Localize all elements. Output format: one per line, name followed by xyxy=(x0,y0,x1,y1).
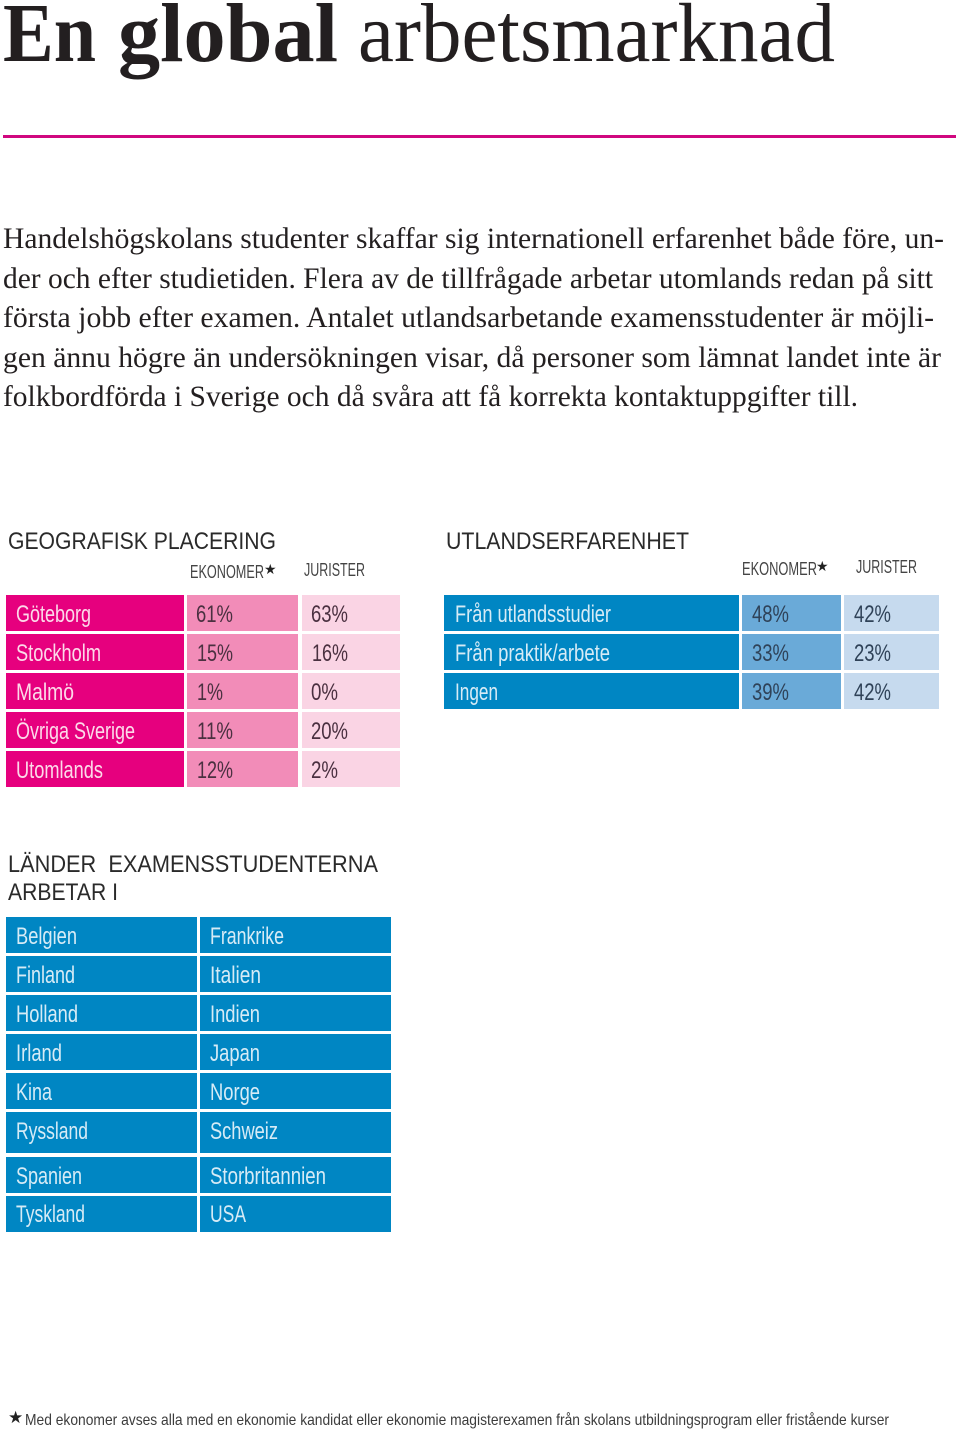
title xyxy=(3,0,835,80)
panel: geografisk placering xyxy=(6,528,400,787)
country table: Irland xyxy=(16,1040,62,1067)
row: Utomlands: Utomlands xyxy=(16,757,103,784)
row: Ingen: 42% xyxy=(854,679,891,706)
country table: Tyskland xyxy=(16,1201,85,1228)
intro text: der och efter studietiden. Flera av de tillfrågade arbetar utomlands redan på sitt xyxy=(3,262,934,295)
row: Stockholm: 16% xyxy=(312,640,348,667)
country table: Holland xyxy=(16,1001,78,1028)
row: Utomlands: 2% xyxy=(311,757,338,784)
row: Malmö xyxy=(6,673,400,709)
row: Göteborg: 63% xyxy=(311,601,348,628)
country table: Belgien xyxy=(16,923,77,950)
country table: USA xyxy=(210,1201,246,1228)
row: Övriga Sverige: 11% xyxy=(197,718,233,745)
row: Från utlandsstudier: 48% xyxy=(752,601,789,628)
row: Göteborg xyxy=(6,595,400,631)
country table: Finland xyxy=(16,962,75,989)
panel: utlandserfarenhet xyxy=(444,528,939,709)
row: Stockholm: Stockholm xyxy=(16,640,101,667)
row: Malmö: Malmö xyxy=(16,679,74,706)
row: Utomlands: 12% xyxy=(197,757,233,784)
row: Malmö: 0% xyxy=(311,679,338,706)
row: Göteborg: Göteborg xyxy=(16,601,91,628)
intro text xyxy=(3,222,944,413)
row: Från utlandsstudier: 42% xyxy=(854,601,891,628)
row: Göteborg: 61% xyxy=(196,601,233,628)
country table xyxy=(6,917,391,1232)
footnote: ★ xyxy=(8,1408,23,1428)
country table: Schweiz xyxy=(210,1118,278,1145)
country table: Italien xyxy=(210,962,261,989)
heading: utlandserfarenhet: UTLANDSERFARENHET xyxy=(446,528,689,555)
country table: Frankrike xyxy=(210,923,284,950)
heading: länder examensstudenterna arbetar i: ARBETAR I xyxy=(8,879,118,906)
row: Från utlandsstudier xyxy=(444,595,939,631)
row: Stockholm xyxy=(6,634,400,670)
row: Utomlands xyxy=(6,751,400,787)
row: Övriga Sverige: Övriga Sverige xyxy=(16,718,135,745)
column header: ekonomer: EKONOMER xyxy=(742,559,817,579)
column header: ekonomer: EKONOMER xyxy=(190,562,264,582)
heading: geografisk placering: GEOGRAFISK PLACERING xyxy=(8,528,276,555)
country table: Indien xyxy=(210,1001,260,1028)
column header: ekonomer: ★ xyxy=(264,562,277,578)
row: Ingen: Ingen xyxy=(455,679,498,706)
heading: länder examensstudenterna arbetar i xyxy=(8,851,378,906)
intro text: första jobb efter examen. Antalet utlandsarbetande examensstudenter är möjli- xyxy=(3,301,934,334)
country table: Storbritannien xyxy=(210,1163,326,1190)
row: Övriga Sverige: 20% xyxy=(311,718,348,745)
country table: Kina xyxy=(16,1079,52,1106)
country table: Norge xyxy=(210,1079,260,1106)
intro text: folkbordförda i Sverige och då svåra att få korrekta kontaktuppgifter till. xyxy=(3,380,858,413)
intro text: Handelshögskolans studenter skaffar sig internationell erfarenhet både före, un- xyxy=(3,222,944,255)
column header: jurister: JURISTER xyxy=(304,560,365,580)
column header: jurister: JURISTER xyxy=(856,557,917,577)
row: Ingen xyxy=(444,673,939,709)
row: Från praktik/arbete: 33% xyxy=(752,640,789,667)
heading: länder examensstudenterna arbetar i: LÄNDER EXAMENSSTUDENTERNA xyxy=(8,851,378,878)
row: Från praktik/arbete: 23% xyxy=(854,640,891,667)
row: Ingen: 39% xyxy=(752,679,789,706)
panel: länder xyxy=(6,851,391,1232)
row: Från utlandsstudier: Från utlandsstudier xyxy=(455,601,611,628)
row: Från praktik/arbete xyxy=(444,634,939,670)
intro text: gen ännu högre än undersökningen visar, då personer som lämnat landet inte är xyxy=(3,341,941,374)
row: Från praktik/arbete: Från praktik/arbete xyxy=(455,640,610,667)
row: Övriga Sverige xyxy=(6,712,400,748)
row: Malmö: 1% xyxy=(197,679,223,706)
column header: ekonomer: ★ xyxy=(816,559,829,575)
country table: Japan xyxy=(210,1040,260,1067)
row: Stockholm: 15% xyxy=(197,640,233,667)
country table: Ryssland xyxy=(16,1118,88,1145)
country table: Spanien xyxy=(16,1163,82,1190)
